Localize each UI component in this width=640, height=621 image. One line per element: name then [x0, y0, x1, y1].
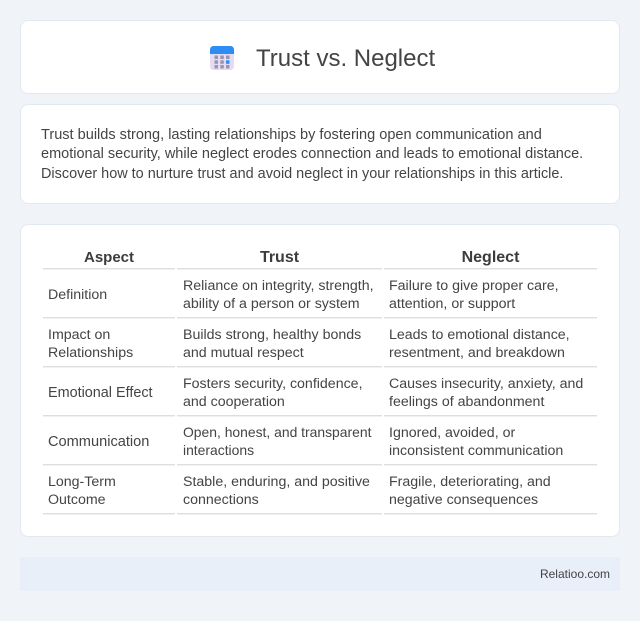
- definition trust: Reliance on integrity, strength,: [183, 278, 374, 294]
- emotional trust: Fosters security, confidence,: [183, 376, 363, 392]
- row: long-term outcome: [48, 474, 116, 508]
- impact trust: Builds strong, healthy bonds: [183, 327, 361, 343]
- footer credit: Relatioo.com: [540, 567, 610, 581]
- impact trust: [183, 327, 361, 361]
- row: impact on relationships: Relationships: [48, 345, 133, 361]
- intro line 3: Discover how to nurture trust and avoid neglect in your relationships in this article.: [41, 166, 563, 182]
- icon: calendar: [210, 46, 234, 70]
- table header: trust: Trust: [260, 249, 299, 266]
- emotional trust: [183, 376, 363, 410]
- outcome neglect: Fragile, deteriorating, and: [389, 474, 551, 490]
- intro line 1: Trust builds strong, lasting relationships by fostering open communication and: [41, 127, 542, 143]
- table header: aspect: Aspect: [84, 249, 134, 266]
- impact trust: and mutual respect: [183, 345, 304, 361]
- emotional neglect: [389, 376, 583, 410]
- communication trust: [183, 424, 372, 458]
- table header: neglect: Neglect: [462, 249, 519, 266]
- row: communication: Communication: [48, 434, 149, 450]
- outcome neglect: [389, 474, 551, 508]
- impact neglect: Leads to emotional distance,: [389, 327, 570, 343]
- intro text panel: [20, 104, 620, 204]
- definition neglect: attention, or support: [389, 296, 515, 312]
- title: Trust vs. Neglect: [256, 45, 435, 72]
- intro line 2: emotional security, while neglect erodes connection and leads to emotional distance.: [41, 146, 583, 162]
- comparison table panel: [20, 224, 620, 537]
- definition trust: ability of a person or system: [183, 296, 360, 312]
- footer bar: [20, 557, 620, 591]
- emotional trust: and cooperation: [183, 394, 285, 410]
- title card: [20, 20, 620, 94]
- outcome trust: connections: [183, 492, 259, 508]
- definition neglect: Failure to give proper care,: [389, 278, 559, 294]
- definition trust: [183, 278, 374, 312]
- definition neglect: [389, 278, 559, 312]
- row: long-term outcome: Long-Term: [48, 474, 116, 490]
- communication trust: Open, honest, and transparent: [183, 424, 371, 440]
- emotional neglect: feelings of abandonment: [389, 394, 544, 410]
- emotional neglect: Causes insecurity, anxiety, and: [389, 376, 583, 392]
- impact neglect: [389, 327, 570, 361]
- communication neglect: Ignored, avoided, or: [389, 425, 515, 441]
- impact neglect: resentment, and breakdown: [389, 345, 565, 361]
- outcome neglect: negative consequences: [389, 492, 538, 508]
- row: long-term outcome: Outcome: [48, 492, 106, 508]
- communication neglect: [389, 425, 563, 459]
- row: emotional effect: Emotional Effect: [48, 385, 153, 401]
- row: impact on relationships: [48, 327, 133, 361]
- communication neglect: inconsistent communication: [389, 443, 563, 459]
- communication trust: interactions: [183, 442, 254, 458]
- row: definition: Definition: [48, 287, 107, 303]
- outcome trust: [183, 474, 370, 508]
- outcome trust: Stable, enduring, and positive: [183, 474, 370, 490]
- row: impact on relationships: Impact on: [48, 327, 110, 343]
